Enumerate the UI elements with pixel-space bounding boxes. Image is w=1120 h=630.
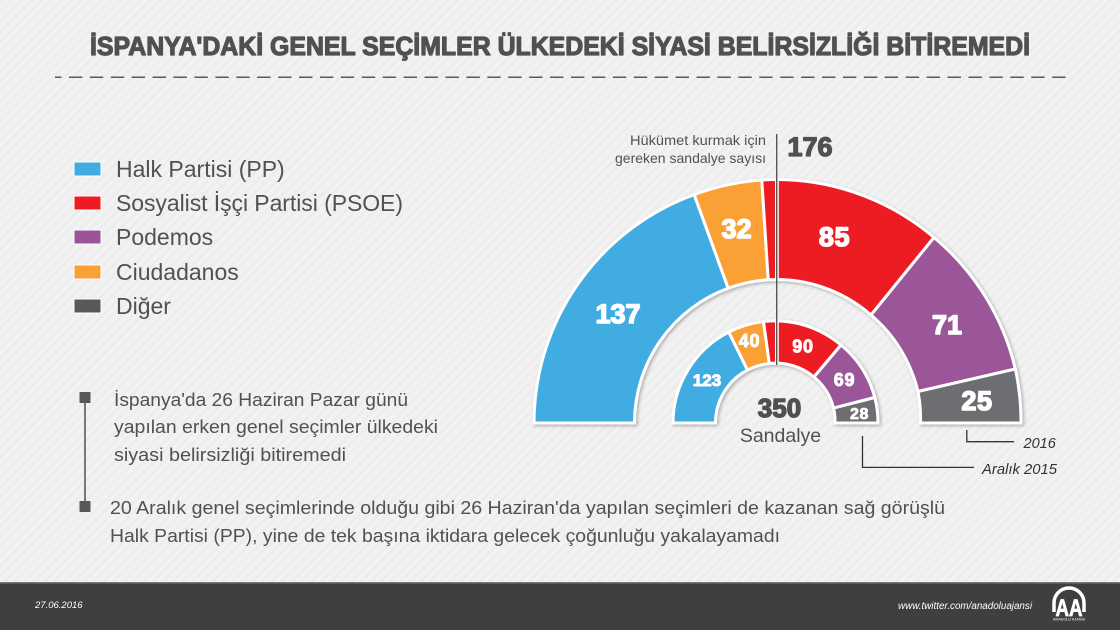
value labels: 2015: 90: [792, 336, 814, 356]
center total: 350: [758, 393, 801, 423]
value labels: 2016: [595, 214, 993, 416]
text block: second note: 20 Aralık genel seçimlerinde olduğu gibi 26 Haziran'da yapılan seçimleri de kazanan sağ görüşlü: [110, 497, 945, 518]
legend item: Podemos: [74, 224, 213, 250]
majority line: [775, 134, 779, 365]
majority label: Hükümet kurmak için: [630, 132, 766, 148]
center total: [740, 393, 821, 447]
chart: 2016 outer semicircle: [534, 180, 1021, 423]
segment: Podemos 69: [814, 345, 875, 408]
segment: PP 137: [534, 195, 728, 423]
segment: PSOE 85: [762, 180, 934, 315]
center total: Sandalye: [740, 425, 821, 447]
text block: first note: İspanya'da 26 Haziran Pazar günü: [114, 389, 408, 410]
legend item: PSOE: Sosyalist İşçi Partisi (PSOE): [116, 190, 403, 216]
segment: Diğer 25: [918, 369, 1021, 423]
legend item: Diğer: [74, 293, 171, 319]
segment: Ciudadanos 32: [694, 180, 768, 288]
value labels: 2015: 123: [693, 371, 721, 390]
icon: Anadolu Ajansı logo: [1053, 588, 1085, 622]
legend item: Ciudadanos: Ciudadanos: [116, 259, 239, 285]
legend item: Podemos: Podemos: [116, 224, 213, 250]
value labels: 2016: 32: [721, 214, 752, 244]
legend item: Diğer: Diğer: [116, 293, 171, 319]
title: İSPANYA'DAKİ GENEL SEÇİMLER ÜLKEDEKİ SİYASİ BELİRSİZLİĞİ BİTİREMEDİ: [90, 31, 1030, 61]
majority label: gereken sandalye sayısı: [615, 150, 766, 166]
majority label: [615, 132, 833, 166]
footer bar: [0, 582, 1120, 630]
icon: Anadolu Ajansı logo: AA: [1056, 595, 1082, 622]
segment: PP 123: [673, 332, 748, 423]
segment: PSOE 90: [764, 321, 841, 377]
date: 27.06.2016: [34, 600, 83, 611]
value labels: 2015: 69: [834, 370, 855, 390]
twitter url: www.twitter.com/anadoluajansi: [898, 601, 1033, 612]
key: Aralık 2015: [862, 436, 1058, 478]
legend: [74, 156, 403, 319]
key: Aralık 2015: Aralık 2015: [981, 462, 1058, 478]
majority label: 176: [788, 132, 833, 162]
value labels: 2016: 137: [595, 299, 641, 329]
key: 2016: [967, 430, 1057, 452]
value labels: 2016: 71: [932, 310, 962, 340]
segment: Diğer 28: [834, 398, 878, 423]
segment: Ciudadanos 40: [729, 322, 769, 370]
key: 2016: 2016: [1022, 436, 1057, 452]
value labels: 2015: 40: [739, 331, 760, 351]
timeline connector: [80, 392, 90, 512]
segment: Podemos 71: [871, 238, 1015, 392]
text block: first note: yapılan erken genel seçimler ülkedeki: [114, 416, 438, 437]
chart: 2015 inner semicircle: [673, 321, 878, 423]
value labels: 2015: 28: [850, 406, 869, 423]
text block: second note: Halk Partisi (PP), yine de tek başına iktidara gelecek çoğunluğu yakalayamadı: [110, 525, 780, 546]
legend item: PP: Halk Partisi (PP): [116, 156, 285, 182]
value labels: 2015: [693, 331, 869, 423]
text block: first note: siyasi belirsizliği bitiremedi: [114, 444, 346, 465]
icon: Anadolu Ajansı logo: ANADOLU AJANSI: [1053, 618, 1085, 622]
value labels: 2016: 85: [819, 222, 850, 252]
value labels: 2016: 25: [961, 386, 993, 416]
